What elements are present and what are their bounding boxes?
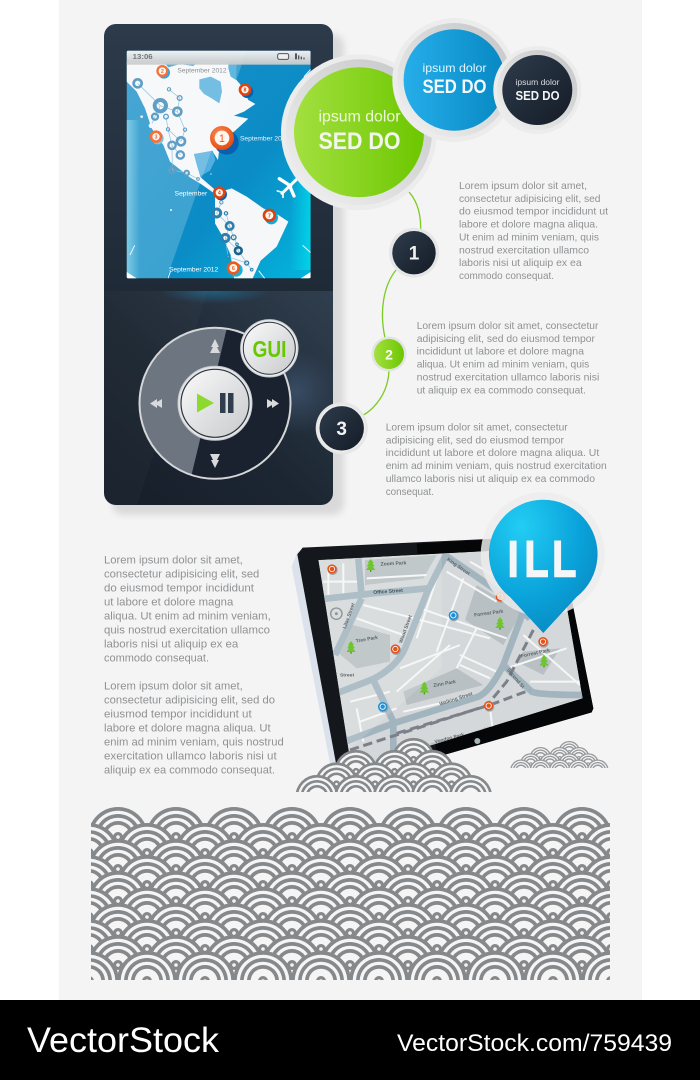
bubble: dark: SED DO (516, 88, 560, 103)
text block 1: Lorem ipsum dolor sit amet, (459, 181, 587, 192)
play icon (197, 394, 214, 412)
text block 1: labore et dolore magna aliqua. (459, 220, 598, 231)
Gulf of Mexico (194, 151, 215, 176)
map labels: Forrest Park (474, 609, 504, 619)
lower body glows (164, 291, 328, 426)
marker 6 (227, 261, 243, 277)
text block 2: Lorem ipsum dolor sit amet, consectetur (417, 321, 599, 332)
text block 3: incididunt ut labore et dolore magna aliqua. Ut (386, 448, 599, 459)
park trees (366, 559, 375, 572)
bubble: blue (392, 18, 516, 142)
clock: 13:06 (133, 52, 153, 61)
footer image id: VectorStock.com/759439 (397, 1030, 672, 1057)
text block 1: laboris nisi ut aliquip ex ea (459, 258, 582, 269)
text block 1 (459, 181, 608, 282)
text block 4: do eiusmod tempor incididunt (104, 582, 254, 594)
marker 2: 2 (161, 69, 164, 75)
northern water (166, 64, 195, 68)
Hudson bay (199, 77, 222, 103)
marker 1 (210, 126, 239, 155)
screen glass reflection (127, 51, 247, 278)
frame reflection (417, 536, 593, 757)
player shadow (112, 34, 344, 515)
map labels: Forrest Park (520, 648, 551, 660)
text block 1: do eiusmod tempor incididunt ut (459, 207, 608, 218)
pin: ILL (481, 492, 605, 633)
pause icon (220, 393, 234, 413)
text block 3: Lorem ipsum dolor sit amet, consectetur (386, 422, 568, 434)
map (318, 547, 583, 772)
map labels: Wood Street (398, 614, 414, 644)
step 2 badge (372, 336, 406, 372)
compass marker (331, 608, 342, 619)
step 1 badge (389, 228, 439, 278)
text block 4: laboris nisi ut aliquip ex ea (104, 638, 239, 650)
tablet black frame (297, 536, 593, 785)
marker 8: 8 (244, 88, 247, 94)
step 3 badge: 3 (336, 419, 347, 440)
marker 3: 3 (155, 135, 158, 141)
player upper body (104, 24, 333, 291)
text block 2: adipisicing elit, sed do eiusmod tempor (417, 334, 596, 345)
GUI button: GUI (252, 336, 286, 362)
map labels: King Street (446, 557, 471, 577)
text block 2: ut aliquip ex ea commodo consequat. (417, 385, 586, 396)
text block 1: Ut enim ad minim veniam, quis (459, 232, 599, 243)
small wave mound (295, 738, 492, 818)
right edge glow (294, 176, 311, 270)
arrow up (210, 339, 220, 353)
map screen (127, 51, 311, 278)
step 2 badge: 2 (385, 346, 393, 362)
screen ticks (130, 69, 311, 278)
tiny wave mound (510, 741, 609, 781)
text block 4: quis nostrud exercitation ullamco (104, 624, 270, 636)
text block 4: aliqua. Ut enim ad minim veniam, (104, 610, 271, 622)
Arctic channel (228, 64, 236, 80)
airplane icon (277, 179, 297, 197)
bubble: blue: ipsum dolor (422, 61, 486, 75)
device: media player (104, 24, 344, 515)
white dots (140, 115, 212, 211)
marker 6: 6 (232, 266, 235, 272)
map screen: September 2012 (169, 266, 219, 273)
map labels: Office Street (373, 588, 403, 596)
text block 1: nostrud exercitation ullamco (459, 245, 589, 256)
text block 4: consectetur adipisicing elit, sed (104, 568, 259, 580)
map labels: Lilac Street (342, 602, 357, 630)
map labels: Tree Park (355, 635, 379, 645)
text block 3: enim ad minim veniam, quis nostrud exercitation (386, 461, 607, 472)
text block 4: Lorem ipsum dolor sit amet, (104, 554, 243, 566)
signal icon (295, 53, 305, 59)
bubble: dark (493, 46, 581, 134)
text block 5: exercitation ullamco laboris nisi ut (104, 750, 277, 762)
control wheel (140, 320, 298, 479)
marker 3 (150, 130, 164, 144)
pin halo (481, 492, 605, 616)
text block 4: ut labore et dolore magna (104, 596, 234, 608)
bubble: green (281, 54, 437, 210)
white streets (323, 562, 580, 742)
map labels: Street (340, 673, 354, 679)
bubble: dark: ipsum dolor (516, 78, 560, 87)
camera dot (474, 738, 480, 744)
text block 5: eiusmod tempor incididunt ut (104, 708, 252, 720)
text block 4 (104, 554, 271, 664)
pin body (489, 500, 598, 633)
text block 2: nostrud exercitation ullamco laboris nisi (417, 372, 599, 383)
ocean (127, 51, 311, 278)
bubble: green: SED DO (318, 128, 400, 155)
arrow down (210, 454, 220, 468)
text block 1: commodo consequat. (459, 271, 554, 282)
map labels: Second St (505, 667, 526, 690)
bubble: green: ipsum dolor (318, 108, 400, 126)
step 3 badge (316, 402, 368, 454)
marker 8 (239, 83, 253, 98)
text block 3 (386, 422, 607, 498)
parks (337, 555, 560, 752)
device: tablet with street map (292, 538, 594, 764)
railway (350, 630, 533, 750)
map labels: September 2012 (177, 68, 227, 75)
marker 4 (213, 186, 227, 200)
text block 5: Lorem ipsum dolor sit amet, (104, 680, 243, 692)
text block 5: labore et dolore magna aliqua. Ut (104, 722, 271, 734)
text block 2: aliqua. Ut enim ad minim veniam, quis (417, 360, 589, 371)
screen corners (127, 272, 311, 278)
marker 1: 1 (219, 133, 225, 145)
centre panel (59, 0, 642, 1000)
route lines (138, 83, 252, 270)
South America (215, 188, 288, 278)
arrow left (150, 399, 162, 408)
text block 2: incididunt ut labore et dolore magna (417, 347, 584, 358)
marker 7: 7 (268, 213, 271, 219)
map pins (327, 564, 338, 575)
map labels: Zoom Park (380, 560, 407, 568)
main roads (324, 553, 582, 750)
bubble: blue: SED DO (422, 77, 486, 98)
text block 1: consectetur adipisicing elit, sed (459, 194, 601, 205)
text block 5: enim ad minim veniam, quis nostrud (104, 736, 284, 748)
text block 4: commodo consequat. (104, 652, 209, 664)
step 1 badge: 1 (409, 244, 420, 264)
footer bar (0, 1000, 700, 1080)
player lower body (104, 291, 333, 505)
text block 3: adipisicing elit, sed do eiusmod tempor (386, 435, 565, 446)
play pause button (178, 366, 252, 440)
text block 5 (104, 680, 284, 776)
map labels: Walking Street (439, 691, 474, 708)
pin label: ILL (508, 531, 576, 588)
map labels (340, 557, 551, 745)
map labels: Zinn Park (433, 679, 457, 689)
marker 4: 4 (218, 191, 221, 197)
text block 5: aliquip ex ea commodo consequat. (104, 764, 275, 776)
text block 2 (417, 321, 599, 396)
wave pattern band (59, 807, 641, 1011)
marker 7 (263, 209, 278, 224)
connector line (362, 189, 421, 416)
text block 3: ullamco laboris nisi ut aliquip ex ea commodo (386, 474, 595, 485)
battery icon (278, 54, 289, 59)
tablet silver side (292, 550, 343, 788)
left edge glow (127, 120, 140, 278)
North America (127, 62, 255, 195)
GUI button (241, 320, 298, 377)
wheel glass highlight (140, 328, 227, 475)
map screen: September (175, 191, 208, 198)
map screen: September 2012 (240, 136, 290, 143)
footer brand: VectorStock (27, 1021, 220, 1060)
marker 2 (156, 65, 170, 79)
text block 5: consectetur adipisicing elit, sed do (104, 694, 275, 706)
map labels: Voodoo Park (434, 732, 465, 745)
arrow right (267, 399, 279, 408)
text block 3: consequat. (386, 487, 434, 498)
map glass highlight (318, 553, 442, 750)
status bar (127, 51, 311, 65)
data rings (134, 79, 223, 204)
